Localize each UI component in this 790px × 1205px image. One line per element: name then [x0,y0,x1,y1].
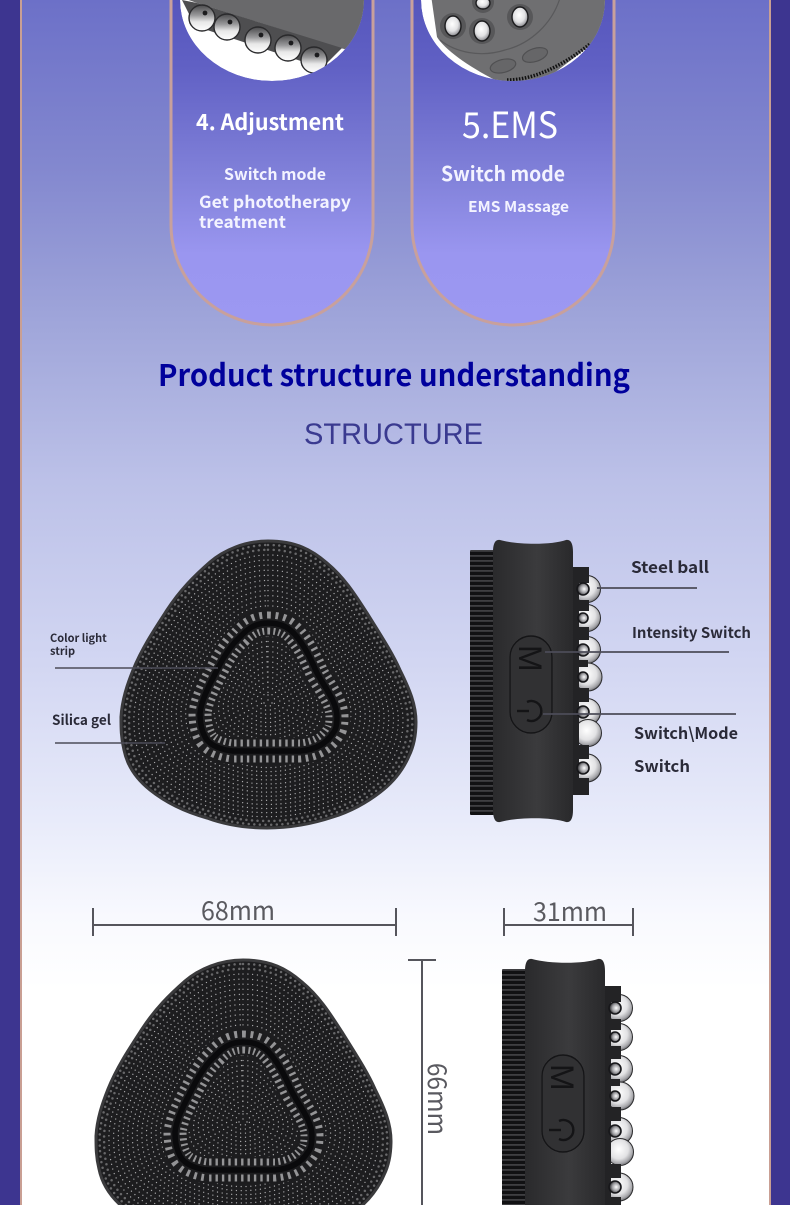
text: get phototherapy treatment: Get phototherapy [199,188,351,213]
heading: 5.EMS: 5.EMS [462,97,558,149]
heading: product structure understanding: Product structure understanding [158,351,630,395]
dimension: 66mm: 66mm [420,1063,457,1135]
icon: device with steel balls [175,0,370,81]
dimension: 66mm [408,960,457,1205]
label: steel ball: Steel ball [631,554,709,578]
label: silica gel: Silica gel [52,710,112,730]
device side view with labels [470,540,751,822]
icon: silicone brush front [121,541,416,828]
icon: device side dimension view [502,959,634,1205]
icon: device front dimension view [96,960,391,1205]
icon: device side profile [470,540,602,822]
label: switch mode switch: Switch\Mode [634,720,738,744]
label: switch mode switch [543,714,738,777]
dimension: 31mm [504,892,633,936]
dimension: 68mm [93,891,396,936]
icon: device underside with massage balls [421,0,610,84]
dimension: 31mm: 31mm [533,892,607,929]
panel: step 5 EMS [412,0,614,325]
heading: 4. Adjustment: 4. Adjustment [196,105,344,137]
label: silica gel [52,710,165,743]
text: get phototherapy treatment: treatment [199,208,286,233]
dimension: 68mm: 68mm [201,891,275,928]
label: switch mode switch: Switch [634,753,690,777]
label: color light strip: Color light [50,630,107,646]
text: switch mode: Switch mode [441,158,565,187]
label: color light strip [50,630,218,668]
label: color light strip: strip [50,643,75,659]
panel: step 4 adjustment [171,0,373,325]
text: get phototherapy treatment [199,188,351,233]
device front view with labels [50,541,416,828]
text: switch mode: Switch mode [224,161,326,185]
subheading: STRUCTURE: STRUCTURE [304,418,483,451]
label: intensity switch: Intensity Switch [632,622,751,643]
text: EMS massage: EMS Massage [468,196,569,217]
label: steel ball [597,554,709,588]
